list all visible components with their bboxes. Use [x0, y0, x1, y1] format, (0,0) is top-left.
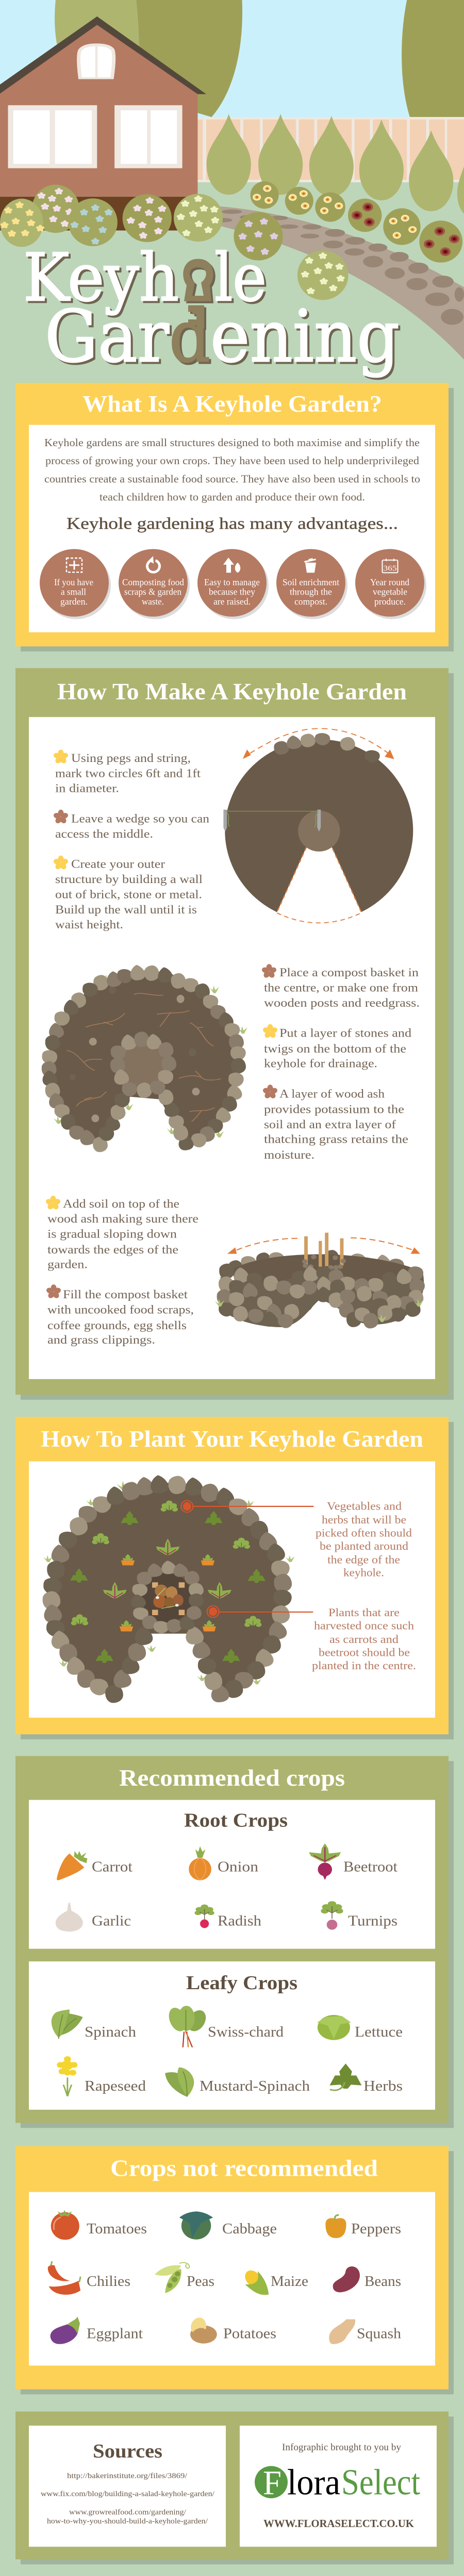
- crop labels: [87, 2221, 401, 2342]
- callout text: edge plants: keyhole.: [343, 1566, 384, 1579]
- step: outer structure: Create your outer: [71, 858, 165, 871]
- panel: sources and sponsor: [15, 2412, 454, 2564]
- fence: [197, 117, 464, 182]
- intro text: teach children how to garden and produce their own food.: [100, 492, 365, 503]
- crop labels: root: Radish: [218, 1913, 261, 1929]
- crop labels: root: Turnips: [348, 1913, 397, 1929]
- icon: eggplant: [51, 2316, 80, 2344]
- icon: chilies: [48, 2261, 80, 2295]
- advantage 4: compost.: [294, 597, 327, 606]
- panel: recommended crops: [15, 1756, 454, 2128]
- icon: lettuce: [317, 2015, 351, 2040]
- icon: cabbage: [179, 2211, 213, 2240]
- callout text: centre plants: planted in the centre.: [312, 1659, 416, 1672]
- icon: calendar 365: 365: [384, 565, 397, 573]
- step: outer structure: out of brick, stone or metal.: [55, 888, 202, 901]
- sources box: www.fix.com/blog/building-a-salad-keyhole-garden/: [41, 2489, 215, 2498]
- diagram: marked out circle: [223, 728, 413, 940]
- step: leave a wedge: access the middle.: [55, 827, 153, 841]
- logo: FloraSelect: [255, 2462, 420, 2502]
- crop labels: leafy: Herbs: [363, 2078, 403, 2094]
- step: add soil: is gradual sloping down: [47, 1228, 177, 1241]
- diagram: planted keyhole garden: [43, 1475, 313, 1703]
- cypress trees: [207, 114, 464, 214]
- house: [0, 16, 206, 230]
- flowering bushes: [0, 181, 462, 300]
- crop labels: Maize: [271, 2273, 308, 2290]
- step: wood ash: soil and an extra layer of: [264, 1118, 396, 1131]
- step: stones and twigs: [262, 1024, 411, 1070]
- icon: raised arrow and leaf: [223, 557, 240, 573]
- crop labels: leafy: Swiss-chard: [208, 2024, 284, 2040]
- intro text: Keyhole gardens are small structures designed to both maximise and simplify the: [44, 437, 420, 449]
- heading: What Is A Keyhole Garden?: [82, 391, 382, 417]
- advantage 4: through the: [290, 587, 332, 597]
- step: compost basket: Place a compost basket in: [279, 966, 419, 979]
- icon: compost bin: [304, 558, 316, 573]
- step: add soil: wood ash making sure there: [47, 1212, 198, 1226]
- plants: [70, 1500, 266, 1663]
- step: pegs and string: [53, 750, 201, 795]
- crop labels: Eggplant: [87, 2326, 143, 2342]
- sources box: http://bakerinstitute.org/files/3869/: [67, 2471, 188, 2480]
- callout text: centre plants: Plants that are: [328, 1606, 400, 1619]
- advantage 1: garden.: [60, 597, 88, 606]
- header garden scene: [0, 0, 464, 360]
- callout text: edge plants: herbs that will be: [322, 1513, 406, 1526]
- title: Keyhole Gardening: [23, 240, 400, 379]
- icon: squash: [329, 2319, 355, 2344]
- logo: FloraSelect: F: [263, 2464, 281, 2502]
- advantage 5: produce.: [374, 597, 406, 606]
- icon: key teeth on the d: [188, 306, 204, 328]
- sponsor box: WWW.FLORASELECT.CO.UK: [263, 2517, 414, 2530]
- heading: Recommended crops: [119, 1765, 345, 1791]
- icon: compost cycle: [145, 556, 161, 574]
- advantage 5: Year round: [370, 577, 409, 587]
- step: fill the compost basket: [46, 1284, 194, 1347]
- step: wood ash: provides potassium to the: [264, 1103, 404, 1116]
- step: add soil: towards the edges of the: [47, 1243, 178, 1257]
- heading: How To Plant Your Keyhole Garden: [41, 1426, 423, 1452]
- callout text: edge plants: Vegetables and: [327, 1500, 402, 1512]
- logo: FloraSelect: lora: [287, 2462, 340, 2502]
- advantage 4: Soil enrichment: [283, 577, 339, 587]
- title: Keyhole Gardening: Keyh: [23, 240, 179, 316]
- crop icons: [48, 2210, 360, 2344]
- advantage 1: [40, 549, 111, 619]
- step: fill the compost basket: coffee grounds, egg shells: [47, 1319, 187, 1332]
- compost basket: [152, 1582, 185, 1615]
- icon: swiss chard: [166, 2006, 209, 2047]
- icon: peas: [155, 2263, 189, 2293]
- icon: radish: [194, 1904, 214, 1928]
- advantage 5: [355, 549, 426, 619]
- callout text: centre plants: beetroot should be: [319, 1646, 410, 1658]
- advantage 2: Composting food: [122, 577, 184, 587]
- crop labels: Squash: [357, 2326, 401, 2342]
- callout text: centre plants: [312, 1606, 416, 1672]
- advantage 3: because they: [209, 587, 255, 597]
- step: fill the compost basket: with uncooked food scraps,: [47, 1303, 194, 1316]
- crop labels: root: Garlic: [92, 1913, 131, 1929]
- callout text: centre plants: harvested once such: [314, 1619, 414, 1632]
- step: fill the compost basket: and grass clippings.: [47, 1333, 155, 1347]
- intro text: [44, 437, 420, 503]
- advantage 2: [119, 549, 190, 619]
- crop labels: root: Onion: [218, 1859, 258, 1875]
- panel: crops not recommended: [15, 2146, 454, 2394]
- step: outer structure: [53, 856, 203, 931]
- intro text: process of growing your own crops. They have been used to help underprivileged: [45, 455, 420, 467]
- crop labels: leafy: Mustard-Spinach: [200, 2078, 310, 2094]
- crop labels: Beans: [364, 2273, 401, 2290]
- advantage 1: If you have: [54, 577, 93, 587]
- icon: pepper: [325, 2215, 346, 2238]
- step: leave a wedge: Leave a wedge so you can: [71, 812, 209, 825]
- step: stones and twigs: keyhole for drainage.: [264, 1057, 377, 1070]
- panel: how to plant: [15, 1417, 454, 1739]
- step: add soil: [45, 1196, 198, 1271]
- step: stones and twigs: Put a layer of stones and: [279, 1027, 411, 1040]
- heading: Crops not recommended: [110, 2155, 378, 2181]
- title: Keyhole Gardening: ening: [210, 296, 400, 379]
- step: stones and twigs: twigs on the bottom of the: [264, 1042, 406, 1056]
- logo: FloraSelect: Select: [341, 2462, 420, 2502]
- crop labels: Peas: [187, 2273, 214, 2290]
- diagram: side view with sloping soil: [215, 1233, 425, 1328]
- icon: maize: [242, 2267, 269, 2295]
- crop labels: Potatoes: [223, 2326, 276, 2342]
- step: outer structure: structure by building a wall: [55, 873, 203, 886]
- step: outer structure: waist height.: [55, 918, 123, 931]
- intro text: countries create a sustainable food source. They have also been used in schools to: [44, 473, 420, 485]
- callout text: edge plants: the edge of the: [327, 1553, 400, 1566]
- crop labels: leafy: Spinach: [85, 2024, 136, 2040]
- sources box: Sources: [93, 2441, 162, 2462]
- icon: herbs: [329, 2063, 361, 2090]
- icon: bean: [333, 2266, 360, 2292]
- sponsor box: Infographic brought to you by: [282, 2442, 402, 2453]
- step: wood ash: A layer of wood ash: [279, 1087, 385, 1100]
- step: pegs and string: in diameter.: [55, 782, 119, 795]
- crop labels: Chilies: [87, 2273, 130, 2290]
- crop labels: root: Carrot: [92, 1859, 132, 1875]
- crop labels: root: Beetroot: [343, 1859, 397, 1875]
- icon: keyhole letter: [183, 259, 213, 301]
- advantage 1: a small: [61, 587, 86, 597]
- step: wood ash: moisture.: [264, 1148, 314, 1162]
- callout text: centre plants: as carrots and: [329, 1633, 399, 1646]
- heading: How To Make A Keyhole Garden: [57, 679, 407, 704]
- crop labels: Peppers: [351, 2221, 401, 2237]
- panel: how to make a keyhole garden: [15, 668, 454, 1400]
- icon: dashed plot: [67, 558, 82, 572]
- diagram: stone wall with twigs: [42, 965, 247, 1152]
- title: Keyhole Gardening: Gar: [45, 296, 170, 379]
- step: compost basket: the centre, or make one from: [264, 981, 419, 995]
- icon: tomato: [51, 2210, 79, 2240]
- advantage 2: waste.: [142, 597, 164, 606]
- callout text: edge plants: [316, 1500, 412, 1579]
- advantage 3: [197, 549, 269, 619]
- trees behind the house: [55, 0, 464, 117]
- step: compost basket: wooden posts and reedgrass.: [264, 996, 420, 1010]
- icon: mustard spinach: [165, 2067, 194, 2097]
- step: compost basket: [261, 964, 420, 1010]
- step: fill the compost basket: Fill the compost basket: [63, 1288, 188, 1301]
- crop labels: Tomatoes: [87, 2221, 147, 2237]
- icon: potato: [190, 2318, 217, 2344]
- crop labels: Cabbage: [222, 2221, 277, 2237]
- panel: what is a keyhole garden: [15, 383, 454, 651]
- title: Keyhole Gardening: le: [214, 240, 267, 316]
- callout text: edge plants: be planted around: [320, 1539, 408, 1552]
- icon: onion: [189, 1846, 211, 1880]
- icon: beetroot: [309, 1843, 341, 1880]
- icon: turnip: [321, 1901, 343, 1930]
- sources box: [29, 2426, 226, 2547]
- crop labels: leafy: Rapeseed: [85, 2078, 146, 2094]
- crop labels: leafy: [85, 2024, 403, 2094]
- step: leave a wedge: [53, 809, 209, 841]
- icon: carrot: [57, 1851, 87, 1880]
- crop labels: root: [92, 1859, 397, 1929]
- step: outer structure: Build up the wall until it is: [55, 903, 197, 917]
- advantage 3: are raised.: [213, 597, 251, 606]
- step: pegs and string: mark two circles 6ft and 1ft: [55, 767, 201, 780]
- sponsor box: [240, 2426, 437, 2547]
- icon: rapeseed: [57, 2056, 77, 2096]
- garden path: [214, 207, 464, 360]
- step: pegs and string: Using pegs and string,: [71, 752, 191, 765]
- sources box: how-to-why-you-should-build-a-keyhole-garden/: [47, 2517, 208, 2526]
- step: wood ash: [262, 1084, 408, 1162]
- advantage 4: [276, 549, 347, 619]
- advantage 3: Easy to manage: [204, 577, 260, 587]
- subheading: leafy crops: Leafy Crops: [186, 1972, 297, 1994]
- callout text: edge plants: picked often should: [316, 1527, 412, 1539]
- step: add soil: garden.: [47, 1258, 88, 1271]
- subheading: root crops: Root Crops: [184, 1810, 288, 1831]
- step: wood ash: thatching grass retains the: [264, 1133, 408, 1146]
- callout markers: [181, 1500, 313, 1617]
- step: add soil: Add soil on top of the: [63, 1197, 179, 1211]
- crop labels: leafy: Lettuce: [355, 2024, 403, 2040]
- advantage 5: vegetable: [373, 587, 407, 597]
- title: Keyhole Gardening: d: [169, 296, 210, 379]
- icon: garlic: [56, 1902, 83, 1931]
- icon: spinach: [52, 2009, 83, 2039]
- crop icons: [52, 1843, 361, 2097]
- advantage 2: scraps & garden: [124, 587, 181, 597]
- sources box: www.growrealfood.com/gardening/: [69, 2508, 187, 2516]
- subheading: Keyhole gardening has many advantages...: [67, 515, 398, 532]
